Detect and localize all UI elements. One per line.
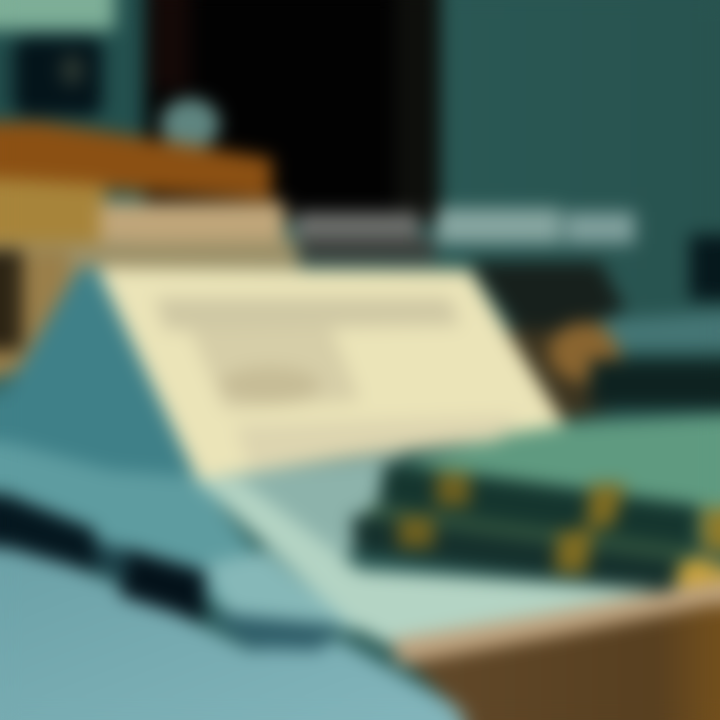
wooden bowl bottom right (392, 580, 720, 720)
pen (0, 492, 340, 650)
lower ochre book (0, 178, 105, 250)
folded teal sheet (0, 266, 215, 478)
pale paper strip under card (195, 478, 660, 650)
headline band right (436, 208, 635, 244)
green cloth surface (400, 415, 720, 540)
cream paper card (97, 268, 565, 480)
blue grey patch under card (200, 455, 400, 560)
top left teal shelf (0, 0, 150, 180)
left dark brown corner (0, 250, 70, 380)
headline band left (100, 202, 285, 242)
dark central panel (145, 0, 440, 225)
table surface (0, 535, 480, 720)
dark object top left (14, 38, 102, 116)
headline band middle (295, 212, 435, 262)
light blue patch beside pen (205, 550, 360, 630)
light fold at left (0, 440, 260, 610)
dark objects right side (470, 235, 720, 420)
tan strip under headline (0, 240, 300, 330)
round glass object (160, 98, 220, 150)
orange wooden book (0, 122, 272, 200)
green book with gold straps (352, 462, 720, 598)
